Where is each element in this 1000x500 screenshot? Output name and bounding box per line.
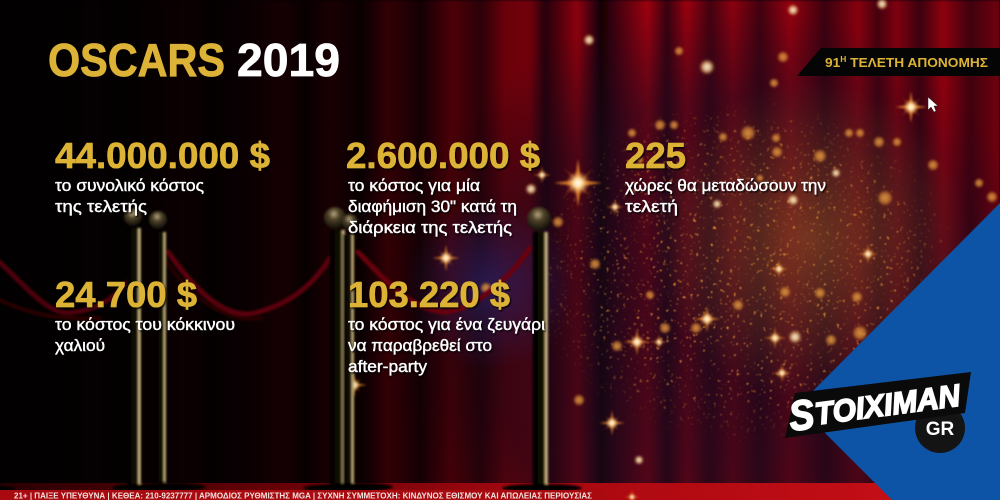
- stat: advert cost: διαφήμιση 30" κατά τη: [348, 197, 517, 216]
- stat: advert cost: 2.600.000 $: [346, 135, 540, 176]
- stat: after-party cost: after-party: [348, 357, 427, 376]
- ribbon: ceremony number: Η: [840, 55, 847, 64]
- gold bokeh lights: [480, 0, 998, 465]
- stanchion posts: [0, 207, 582, 492]
- stat: red carpet cost: το κόστος του κόκκινου: [55, 315, 235, 334]
- red carpet floor: [0, 483, 1000, 500]
- stat: after-party cost: 103.220 $: [348, 274, 510, 315]
- stat: red carpet cost: χαλιού: [55, 336, 105, 355]
- stat: after-party cost: [348, 274, 545, 376]
- stat: advert cost: διάρκεια της τελετής: [348, 218, 512, 237]
- stat: total cost: [55, 135, 270, 216]
- stat: countries: [625, 135, 826, 216]
- logo: Stoiximan GR: TOIXIMAN: [813, 378, 963, 432]
- stat: countries: χώρες θα μεταδώσουν την: [625, 176, 826, 195]
- icon: mouse cursor: [928, 97, 938, 112]
- stat: after-party cost: να παραβρεθεί στο: [348, 336, 492, 355]
- stat: total cost: το συνολικό κόστος: [55, 176, 204, 195]
- logo: Stoiximan GR: GR: [926, 419, 955, 440]
- star sparkles: [341, 91, 927, 500]
- title year: 2019: [237, 34, 340, 86]
- velvet ropes: [0, 248, 530, 319]
- logo: Stoiximan GR: S: [786, 390, 817, 440]
- logo: Stoiximan GR: [785, 371, 971, 453]
- ribbon: ceremony number: ΤΕΛΕΤΗ ΑΠΟΝΟΜΗΣ: [846, 55, 988, 70]
- stat: countries: 225: [625, 135, 686, 176]
- stat: total cost: της τελετής: [55, 197, 147, 216]
- ribbon: ceremony number: [797, 48, 1000, 76]
- title: OSCARS: [48, 34, 225, 86]
- blue corner triangle: [798, 203, 1000, 500]
- stat: advert cost: το κόστος για μία: [348, 176, 480, 195]
- ribbon: ceremony number: 91: [825, 55, 839, 70]
- gold sparkle dust: [548, 101, 952, 440]
- stat: red carpet cost: [55, 274, 235, 355]
- stat: total cost: 44.000.000 $: [55, 135, 270, 176]
- stat: countries: τελετή: [625, 197, 678, 216]
- stat: advert cost: [346, 135, 540, 237]
- stat: after-party cost: το κόστος για ένα ζευγάρι: [348, 315, 545, 334]
- stat: red carpet cost: 24.700 $: [55, 274, 197, 315]
